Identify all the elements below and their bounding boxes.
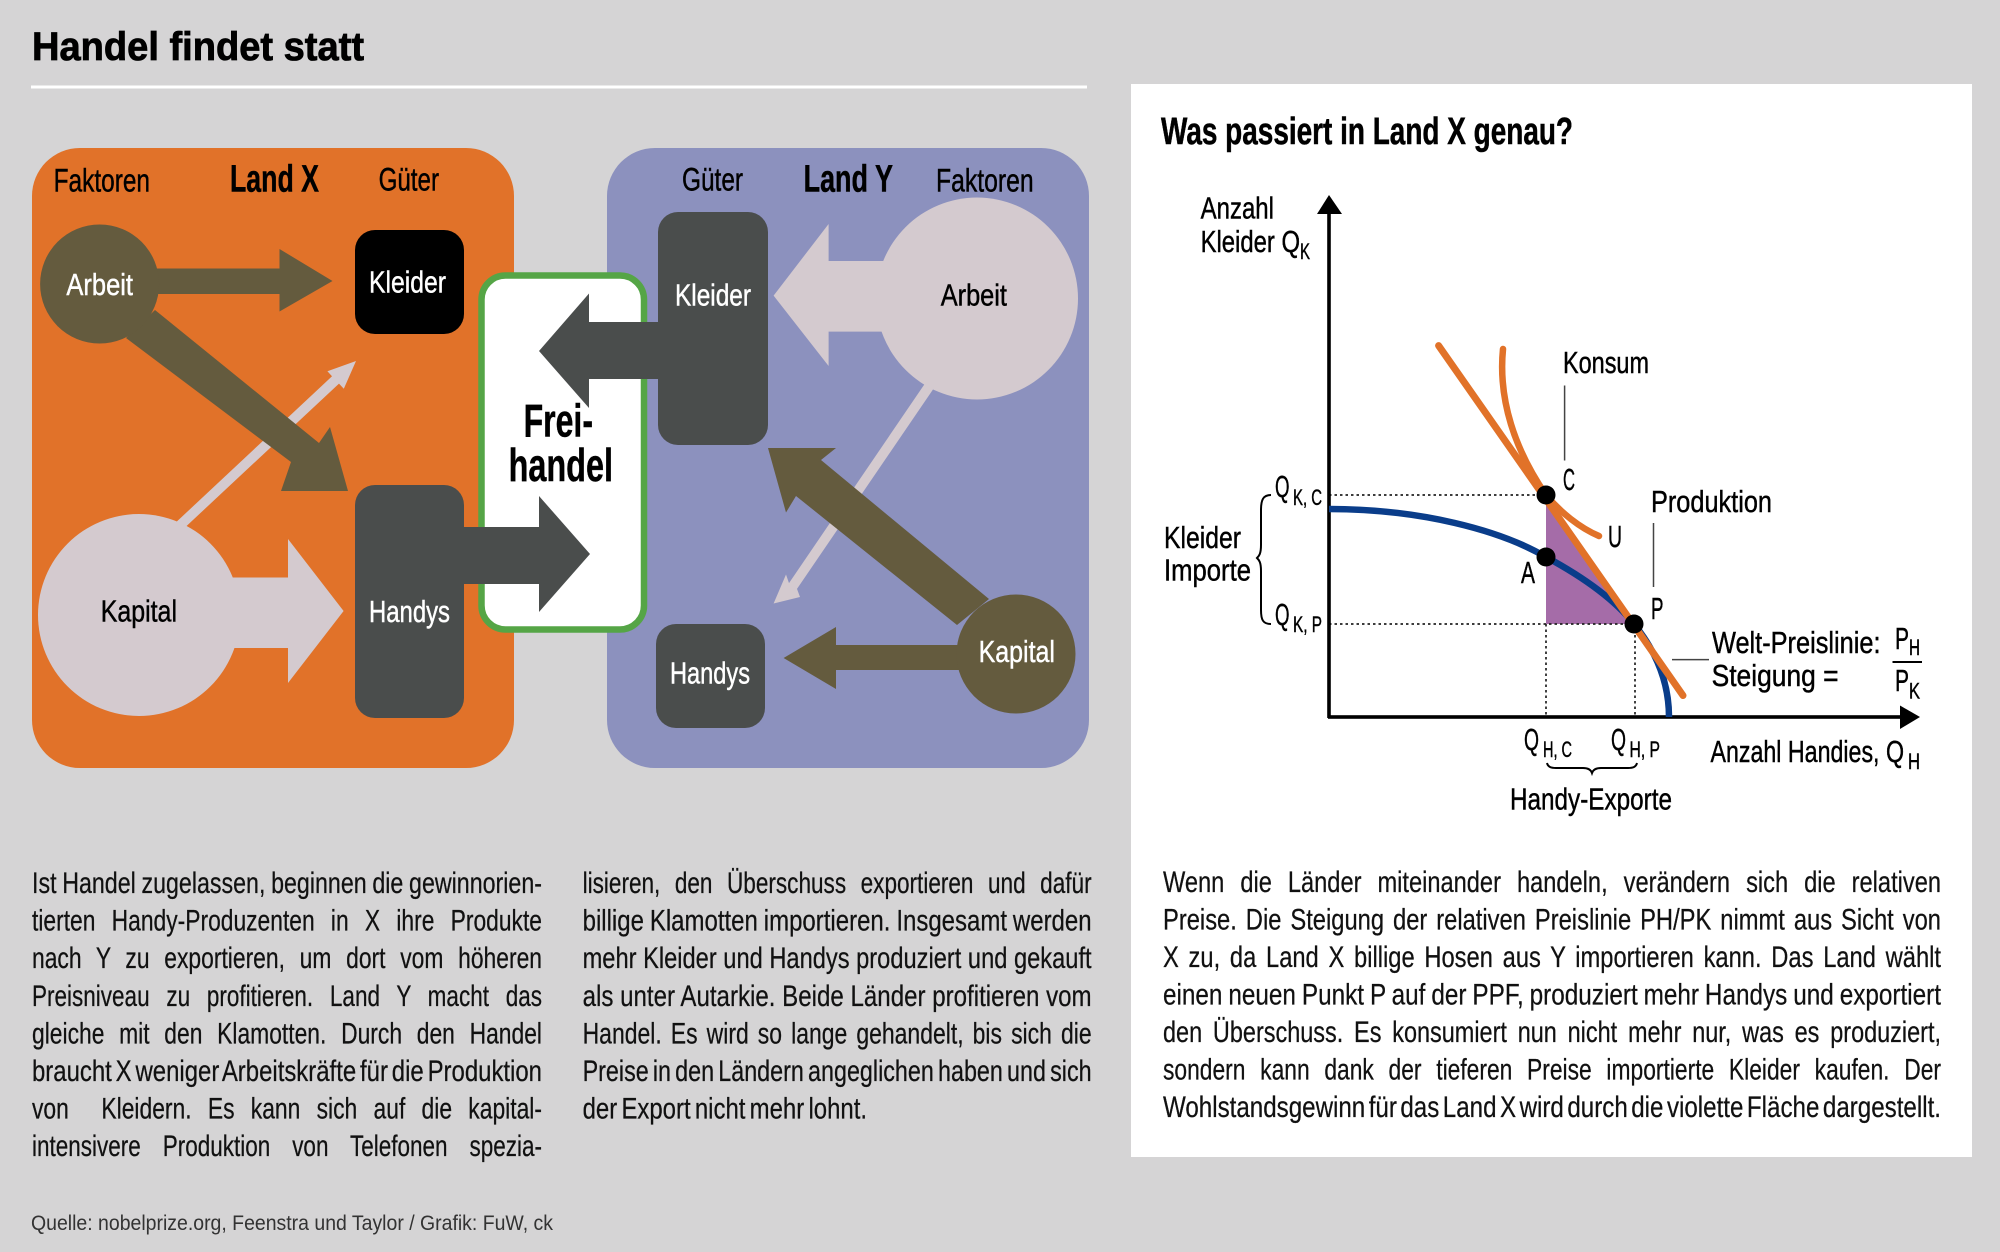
label: Frei-: Frei- [524,395,593,447]
chart: production possibility [1164,190,1922,817]
text block: middle column: mehr Kleider und Handys produziert und gekauft [583,942,1092,975]
text block: left column: nach Y zu exportieren, um dort vom höheren [32,942,542,975]
label: Konsum: Konsum [1563,345,1649,380]
heading: Land Y: Land Y [804,158,893,200]
label: U: U [1608,519,1622,554]
axis: x [1328,706,1920,729]
label: Welt-Preislinie: P [1895,621,1909,656]
label: P: P [1651,591,1664,626]
label: Welt-Preislinie: H [1909,635,1920,660]
heading: Güter Land Y: Güter [682,162,743,198]
arrow: Kapital to Kleider small [172,361,356,534]
text block: left column: Ist Handel zugelassen, beginnen die gewinnorien- [32,867,542,900]
label: handel: handel [509,439,613,491]
node: Arbeit X [40,224,159,344]
label: y axis: Kleider Q [1201,224,1300,259]
text block: left column: Preisniveau zu profitieren. Land Y macht das [32,980,542,1013]
node: Kapital X: Kapital [101,594,177,629]
point P [1624,614,1644,634]
label: Kleider Importe: Kleider [1164,520,1241,555]
arrow: Handys export [455,496,590,612]
curve: utility U [1502,349,1599,536]
text block: middle column: lisieren, den Überschuss exportieren und dafür [583,867,1092,900]
label: QH,P: H, P [1630,737,1660,762]
label: Kleider Importe [1164,520,1251,588]
axis: y [1317,195,1342,718]
label: QH,C: H, C [1543,737,1572,762]
node: Handys X [355,485,464,718]
label: Welt-Preislinie: K [1909,679,1920,704]
label: x axis: Anzahl Handies, Q [1710,734,1904,769]
label: QK,C [1275,469,1322,510]
point A [1536,548,1556,566]
label: QK,C: K, C [1293,485,1322,510]
point C [1536,486,1556,504]
arrow: Kapital to Handys [160,539,344,683]
arrow: Kapital to Kleider Y [768,448,989,625]
panel: Land Y [607,148,1089,768]
panel: Was passiert in Land X genau [1131,84,1972,1157]
label: QH,P [1611,722,1660,762]
line: world price [1439,346,1683,696]
panel: Land X [32,148,514,768]
label: QH,C [1524,722,1572,762]
label: A: A [1521,555,1535,590]
node: Arbeit Y [876,198,1078,400]
source note: Quelle: nobelprize.org, Feenstra und Taylor / Grafik: FuW, ck [31,1212,553,1235]
label: Welt-Preislinie: Welt-Preislinie: [1712,625,1880,660]
title: Handel findet statt [32,25,364,69]
arrow: Arbeit to Handys small [774,382,934,604]
heading: Güter Land X: Güter [379,162,439,198]
text block: left column: intensivere Produktion von Telefonen spezia- [32,1130,542,1163]
label: QK,P: K, P [1293,612,1322,637]
text block: middle column: als unter Autarkie. Beide Länder profitieren vom [583,980,1092,1013]
heading: Land X: Land X [230,158,319,200]
text block: left column: gleiche mit den Klamotten. Durch den Handel [32,1017,542,1050]
panel: Freihandel [482,276,644,630]
text block: right explanation [1163,866,1942,1124]
arrow: Kleider export [539,294,670,408]
node: Handys Y: Handys [670,656,750,691]
label: y axis: K [1300,239,1310,264]
text block: middle column: der Export nicht mehr lohnt. [583,1093,867,1126]
label: Handy-Exporte: Handy-Exporte [1510,782,1672,817]
arrow: Arbeit to Handys [126,310,348,491]
brace: Handy-Exporte [1547,763,1637,773]
text block: middle column: billige Klamotten importieren. Insgesamt werden [583,905,1092,938]
heading: Faktoren Land X: Faktoren [54,162,150,198]
node: Kapital X [38,514,240,716]
label: Welt-Preislinie: P [1895,663,1909,698]
node: Kleider X: Kleider [369,265,446,300]
text block: left column: braucht X weniger Arbeitskräfte für die Produktion [32,1055,542,1088]
label: Kleider Importe: Importe [1164,553,1251,588]
node: Kapital Y [956,594,1076,714]
arrow: Kapital to Handys Y [784,627,980,689]
surplus triangle [1546,495,1634,624]
node: Kleider Y: Kleider [675,278,751,313]
node: Kleider Y [658,212,768,445]
heading: Faktoren Land Y: Faktoren [936,162,1034,198]
arrow: Arbeit to Kleider Y [774,224,900,366]
text block: left column: tierten Handy-Produzenten in X ihre Produkte [32,905,542,938]
arrow: Arbeit to Kleider [110,249,332,312]
brace: Kleider Importe [1257,495,1271,624]
label: y axis [1201,190,1310,264]
text block: left column [32,867,542,1163]
node: Arbeit Y: Arbeit [941,278,1007,313]
label: Produktion: Produktion [1651,484,1772,519]
heading: Was passiert in Land X genau? [1161,111,1573,153]
label: x axis: H [1908,749,1920,774]
text block: left column: von Kleidern. Es kann sich auf die kapital- [32,1093,542,1126]
label: y axis: Anzahl [1201,190,1274,226]
label: QH,C: Q [1524,722,1539,757]
text block: middle column: Handel. Es wird so lange gehandelt, bis sich die [583,1017,1092,1050]
node: Arbeit X: Arbeit [66,267,133,302]
node: Kapital Y: Kapital [979,634,1055,669]
text block: middle column: Preise in den Ländern angeglichen haben und sich [583,1055,1092,1088]
label: C: C [1563,462,1575,497]
node: Handys Y [656,624,765,728]
label: Welt-Preislinie [1712,621,1922,704]
label: QK,C: Q [1275,469,1290,504]
node: Kleider X [355,230,464,334]
label: Welt-Preislinie: Steigung = [1712,658,1839,693]
curve: PPF [1329,509,1669,717]
label: QK,P [1275,597,1322,637]
label: QH,P: Q [1611,722,1626,757]
node: Handys X: Handys [369,594,450,629]
text block: middle column [583,867,1092,1126]
label: QK,P: Q [1275,597,1290,632]
